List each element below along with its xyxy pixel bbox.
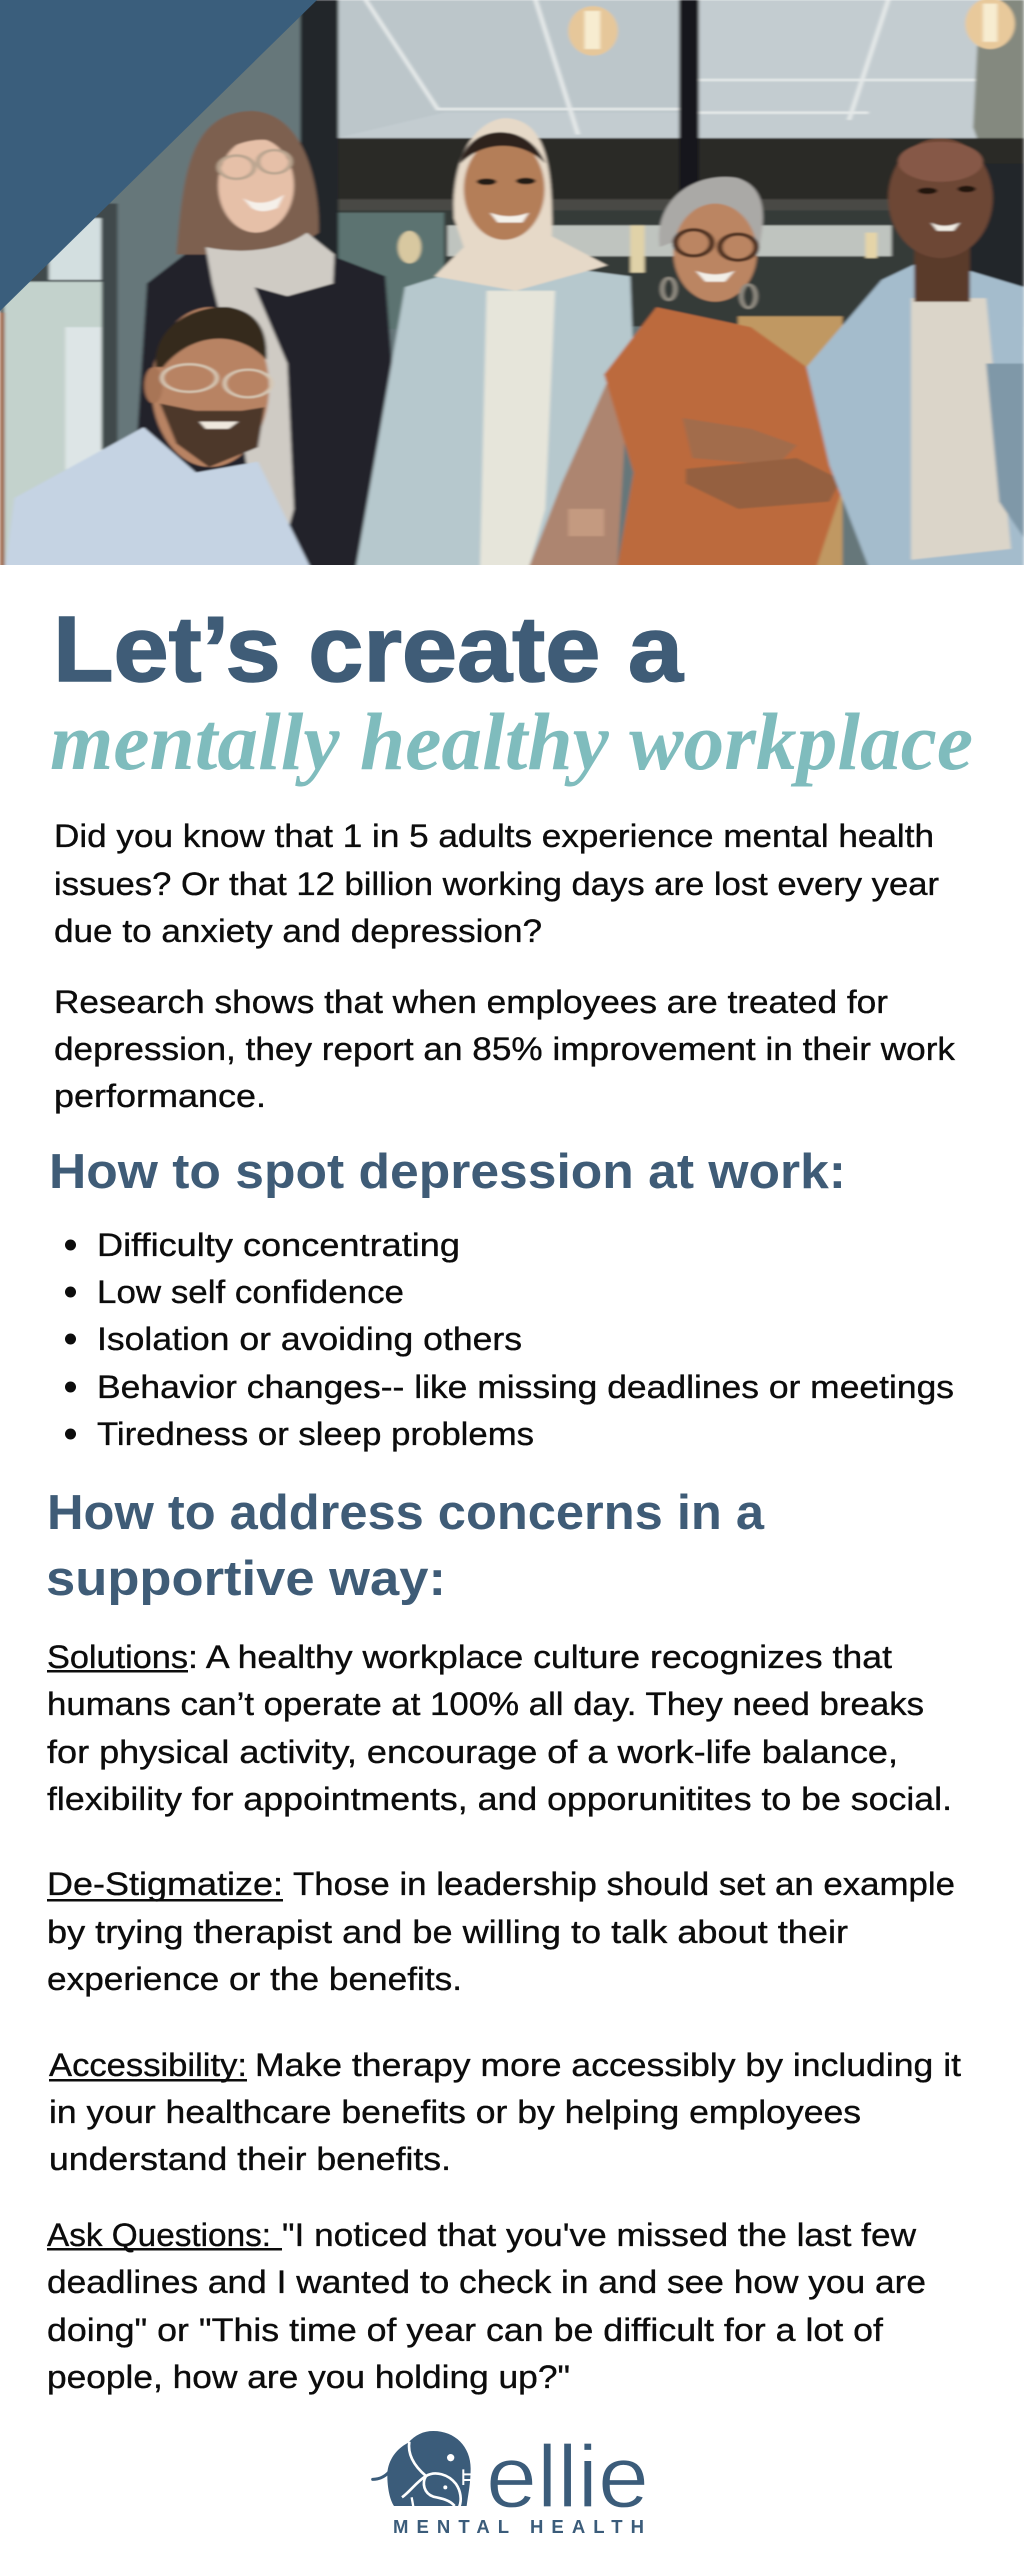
wordmark: ellie (486, 2427, 649, 2526)
text block: ask questions: "I noticed that you've missed the last few (282, 2217, 917, 2253)
text block: solutions: flexibility for appointments, and opporunitites to be social. (47, 1781, 952, 1817)
bullet list: signs of depression: Low self confidence (97, 1274, 404, 1310)
text block: solutions (47, 1639, 952, 1817)
text block: ask questions: Ask Questions: (47, 2217, 271, 2253)
icon: elephant and calf (373, 2431, 471, 2507)
title (50, 597, 973, 787)
text block: solutions: Solutions (47, 1639, 188, 1675)
text block: accessibility: Make therapy more accessibly by including it (255, 2047, 961, 2083)
person: woman with grey hair in orange dress (604, 177, 849, 567)
text block: de-stigmatize: experience or the benefits. (47, 1961, 462, 1997)
heading: how to spot depression: How to spot depression at work: (49, 1145, 846, 1199)
heading: how to address concerns: supportive way: (46, 1552, 446, 1606)
title: mentally healthy workplace (50, 696, 973, 787)
intro paragraph: statistics: due to anxiety and depression? (54, 913, 542, 949)
bullet list: signs of depression: Tiredness or sleep problems (97, 1416, 534, 1452)
bullet list: signs of depression (65, 1227, 954, 1452)
corner triangle accent (0, 0, 317, 311)
intro paragraph: statistics (54, 818, 939, 949)
text block: accessibility (49, 2047, 961, 2177)
logo: ellie mental health (373, 2427, 649, 2537)
text block: solutions: : A healthy workplace culture recognizes that (188, 1639, 892, 1675)
bullet list: signs of depression: Isolation or avoiding others (97, 1321, 522, 1357)
intro paragraph: research (54, 984, 956, 1114)
text block: de-stigmatize: by trying therapist and be willing to talk about their (47, 1914, 848, 1950)
intro paragraph: research: performance. (54, 1078, 266, 1114)
person: man with glasses in the front (5, 307, 310, 567)
intro paragraph: statistics: Did you know that 1 in 5 adults experience mental health (54, 818, 934, 854)
title: Let’s create a (53, 597, 684, 701)
text block: solutions: humans can’t operate at 100% all day. They need breaks (47, 1686, 924, 1722)
person: woman in black cardigan (137, 111, 392, 567)
text block: de-stigmatize: De-Stigmatize: (47, 1866, 283, 1902)
bullet list: signs of depression: Difficulty concentrating (97, 1227, 460, 1263)
intro paragraph: statistics: issues? Or that 12 billion working days are lost every year (54, 866, 939, 902)
text block: accessibility: in your healthcare benefits or by helping employees (49, 2094, 861, 2130)
text block: accessibility: understand their benefits. (49, 2141, 451, 2177)
text block: ask questions (47, 2217, 926, 2395)
text block: de-stigmatize (47, 1866, 955, 1997)
text block: ask questions: people, how are you holding up?" (47, 2359, 570, 2395)
photo: five smiling colleagues in an office (0, 0, 1024, 567)
bullet list: signs of depression: Behavior changes-- like missing deadlines or meetings (97, 1369, 954, 1405)
text block: de-stigmatize: Those in leadership should set an example (293, 1866, 955, 1902)
intro paragraph: research: depression, they report an 85% improvement in their work (54, 1031, 956, 1067)
person: man in denim jacket (807, 138, 1024, 567)
tagline: MENTAL HEALTH (393, 2516, 644, 2537)
text block: accessibility: Accessibility: (49, 2047, 247, 2083)
heading: how to address concerns (46, 1486, 765, 1606)
heading: how to address concerns: How to address concerns in a (47, 1486, 765, 1540)
person: woman in hijab and pale blazer (356, 118, 634, 567)
intro paragraph: research: Research shows that when employees are treated for (54, 984, 888, 1020)
text block: ask questions: deadlines and I wanted to check in and see how you are (47, 2264, 926, 2300)
text block: solutions: for physical activity, encourage of a work-life balance, (47, 1734, 898, 1770)
text block: ask questions: doing" or "This time of year can be difficult for a lot of (47, 2312, 883, 2348)
